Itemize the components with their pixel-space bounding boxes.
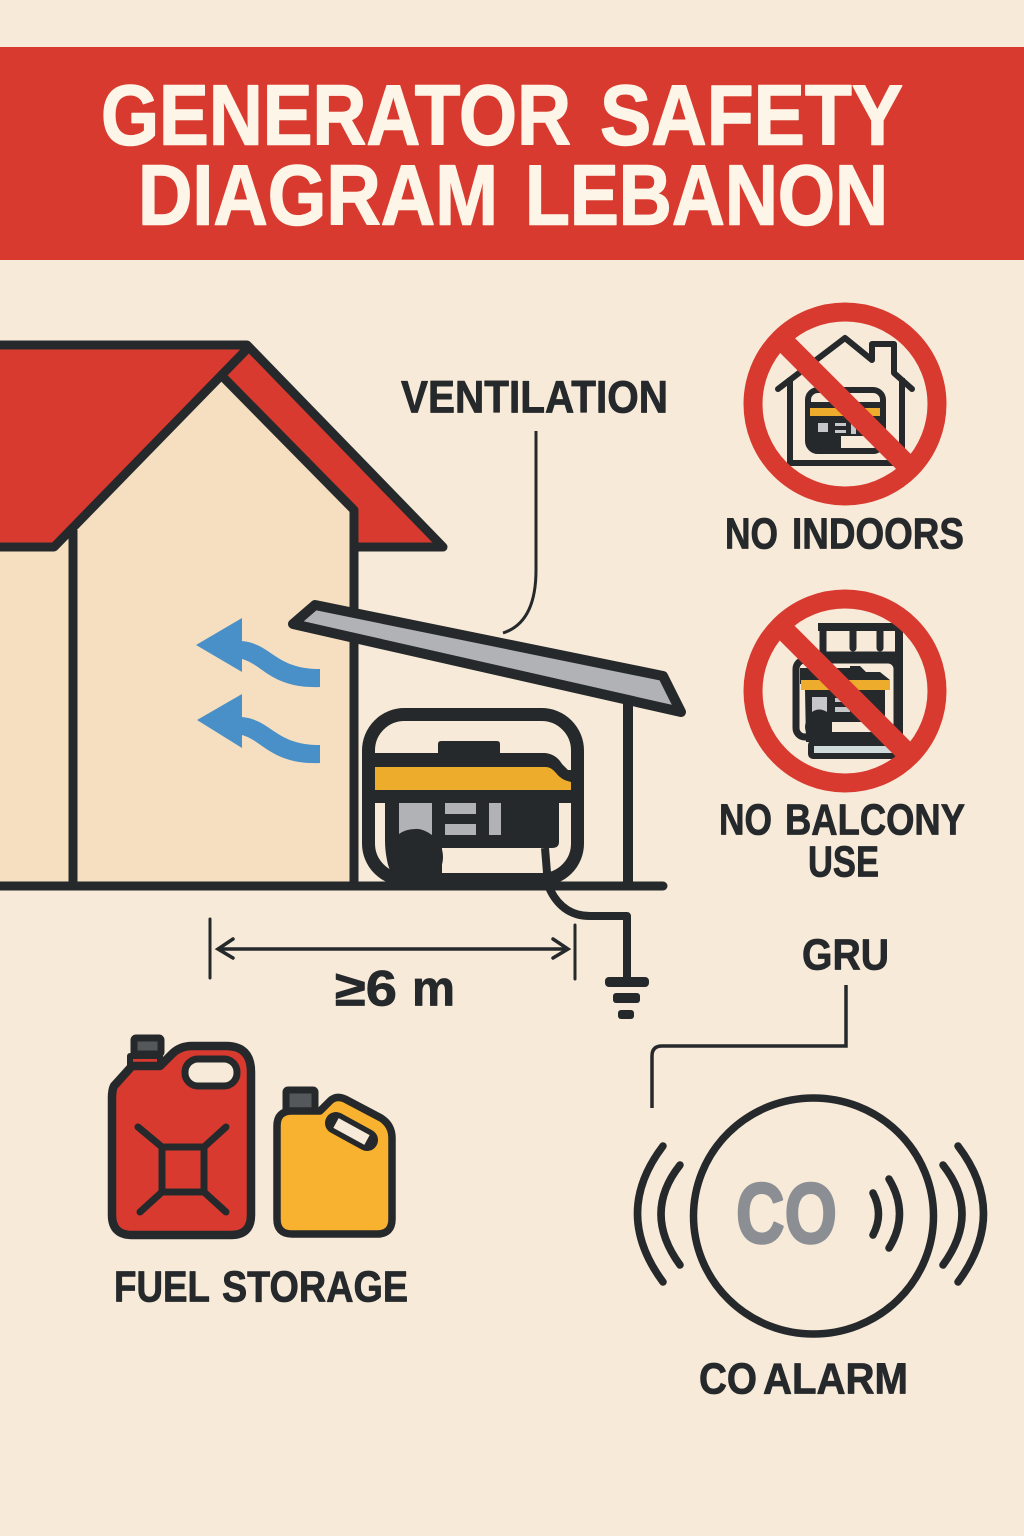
distance label (335, 960, 455, 1016)
CO alarm label: ALARM (763, 1354, 908, 1404)
title banner: DIAGRAM (138, 148, 498, 244)
ventilation leader line (503, 431, 536, 633)
airflow arrows (196, 618, 320, 763)
distance label: m (412, 960, 455, 1016)
icon: no balcony (753, 599, 937, 783)
title banner: GENERATOR (101, 68, 571, 164)
fuel storage label: FUEL (114, 1262, 210, 1312)
no indoors label (725, 510, 964, 558)
distance label: ≥6 (335, 960, 397, 1016)
distance dimension (210, 919, 575, 979)
GRU leader line (652, 985, 846, 1108)
icon: no indoors (753, 312, 937, 496)
title banner: SAFETY (600, 68, 903, 164)
CO alarm label (699, 1354, 908, 1404)
no balcony label: USE (808, 838, 879, 886)
icon: CO alarm (638, 1098, 984, 1334)
title banner: LEBANON (525, 148, 888, 244)
ground line (0, 882, 663, 890)
icon: red fuel can (112, 1038, 251, 1235)
fuel storage label (114, 1262, 408, 1312)
title banner (0, 47, 1024, 260)
icon: yellow fuel can (277, 1090, 392, 1234)
ground cable and earth symbol (545, 848, 649, 1019)
no balcony label (719, 796, 965, 886)
fuel storage label: STORAGE (222, 1262, 408, 1312)
no balcony label: NO (719, 796, 772, 844)
no indoors label: INDOORS (792, 510, 964, 558)
icon: CO alarm: CO (736, 1166, 837, 1262)
no indoors label: NO (725, 510, 778, 558)
ventilation label: VENTILATION (401, 372, 668, 422)
generator (368, 714, 578, 885)
GRU label: GRU (802, 930, 889, 980)
house (0, 345, 443, 885)
CO alarm label: CO (699, 1354, 757, 1404)
no balcony label: BALCONY (785, 796, 965, 844)
shelter roof and post (293, 605, 681, 885)
